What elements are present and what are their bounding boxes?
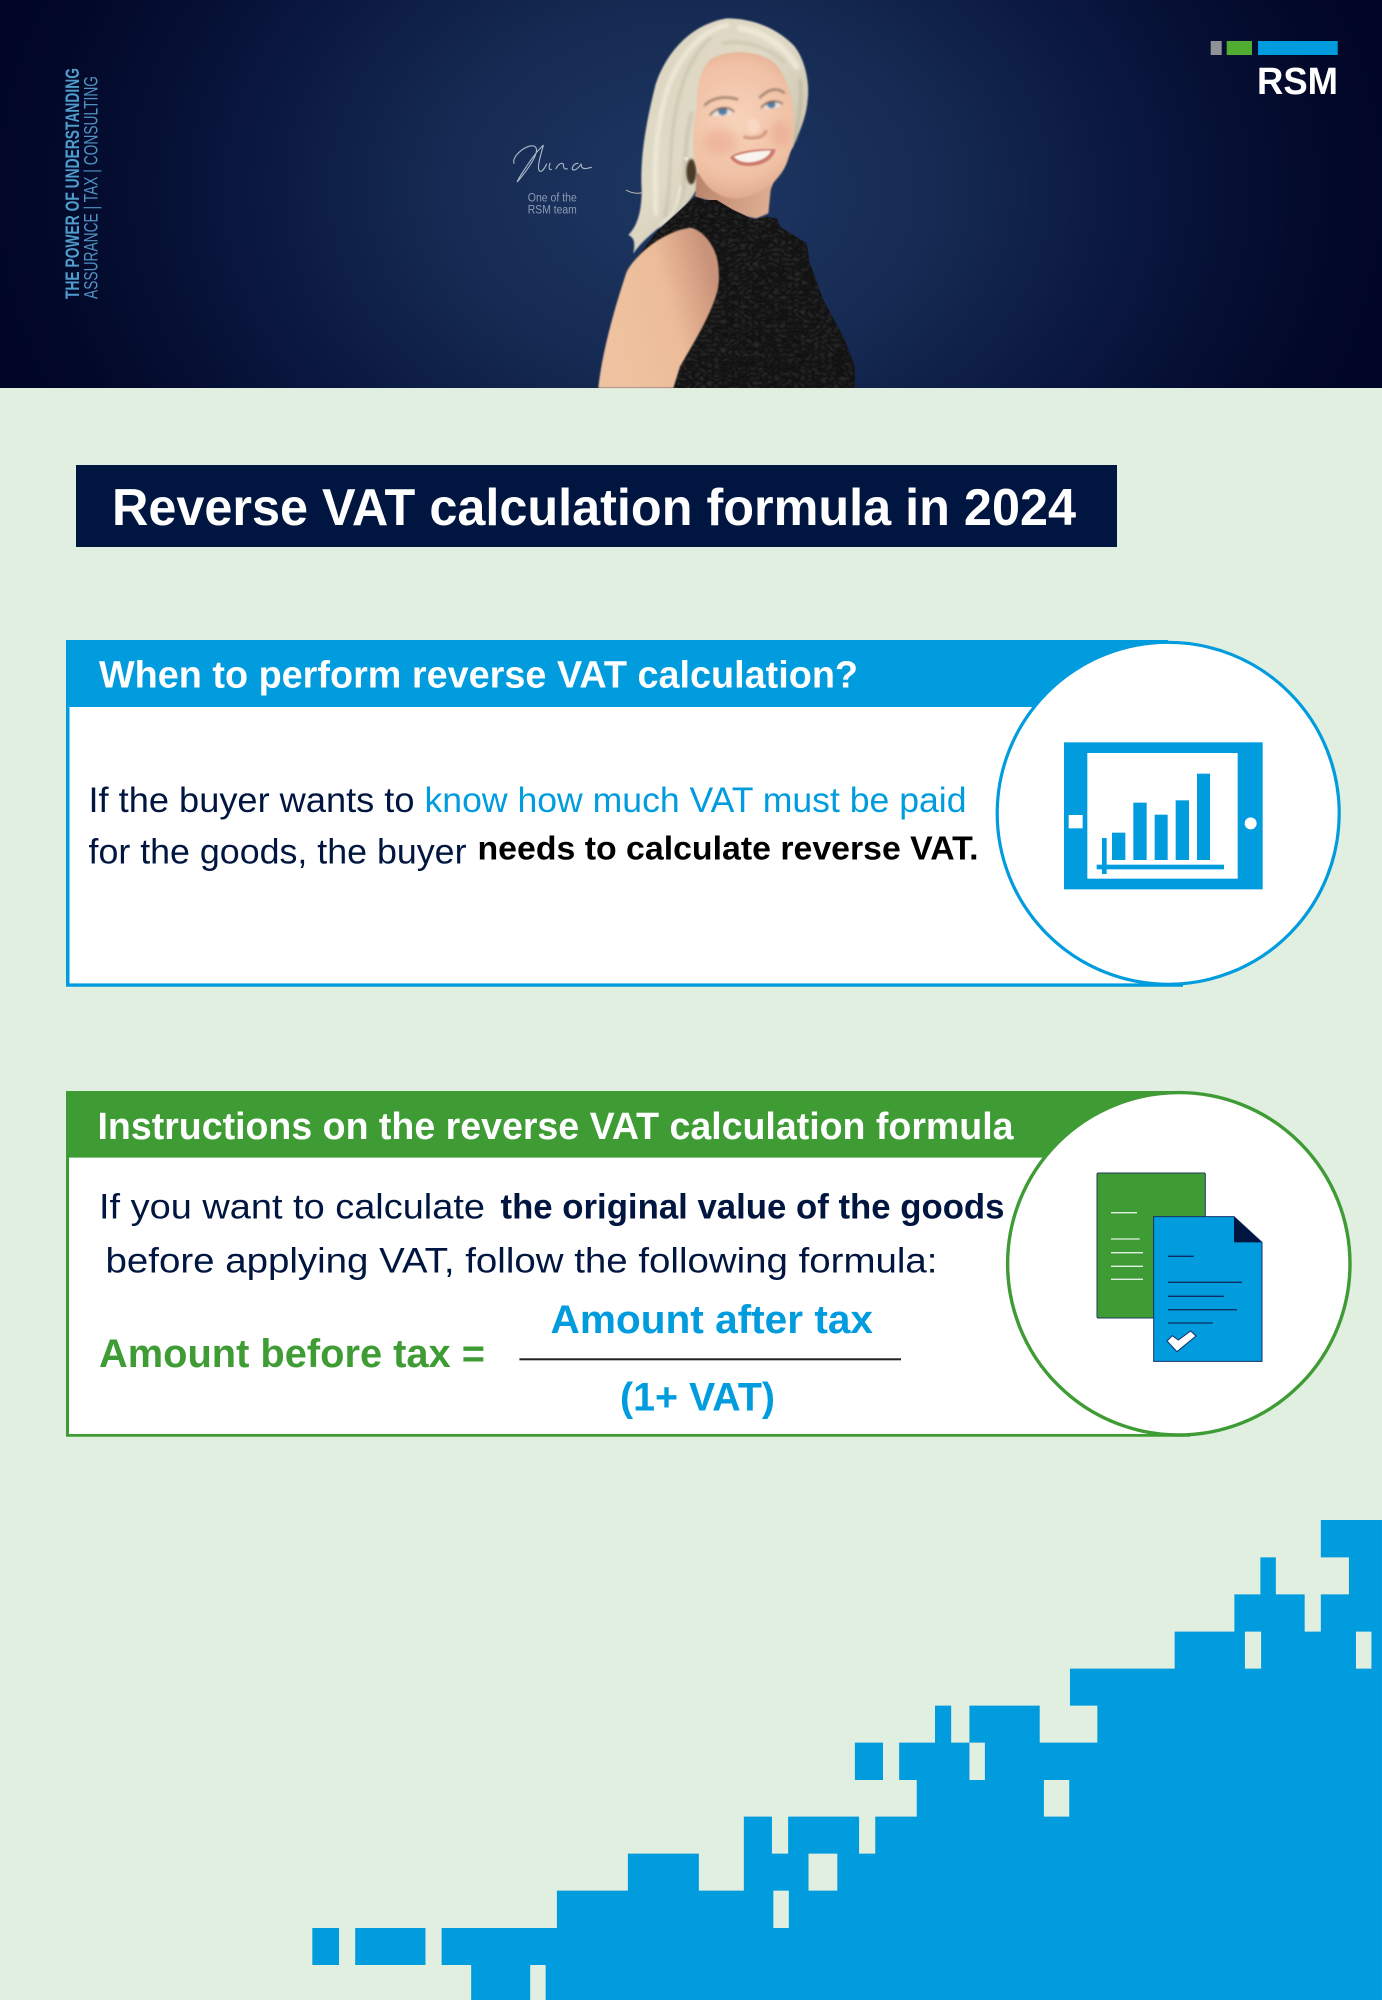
panel text: If you want to calculate [99,1187,485,1226]
panel heading: Instructions on the reverse VAT calculation formula [98,1106,1014,1148]
icon: tablet with bar chart [1064,742,1263,889]
signature: Nina: One of the [528,193,577,205]
neck [695,173,777,218]
icon: documents with check mark [1097,1173,1262,1361]
panel text: If the buyer wants to [88,781,414,820]
panel body [66,1091,1190,1437]
signature: Nina [514,145,591,216]
RSM logo [1211,41,1338,103]
portrait photo of Nina [598,18,855,388]
banner background [0,0,1382,388]
arm [598,228,719,388]
panel text [88,781,978,871]
black dress [627,197,855,388]
panel text [99,1187,1004,1280]
panel text: the original value of the goods [500,1187,1004,1226]
eyebrows [705,90,784,105]
eyes [710,101,783,116]
dark hair and earring behind the ear [684,157,696,184]
face [693,52,794,198]
formula: (1+ VAT) [620,1376,775,1420]
title bar: Reverse VAT calculation formula in 2024 [112,479,1076,537]
panel: when to perform reverse VAT calculation [66,640,1339,987]
stray hair strand [626,190,643,193]
formula [99,1298,901,1420]
signature: Nina: RSM team [528,204,577,216]
side tagline: ASSURANCE | TAX | CONSULTING [82,76,102,299]
smile [730,149,776,166]
nose [743,119,766,138]
panel body [66,640,1183,987]
decorative pixel staircase [312,1520,1382,2000]
circle badge [1008,1093,1350,1435]
panel text: needs to calculate reverse VAT. [478,829,978,866]
panel text: before applying VAT, follow the following formula: [106,1241,937,1280]
header banner [0,0,1382,388]
circle badge [997,642,1339,984]
formula: Amount before tax = [99,1332,485,1376]
panel: instructions on the formula [66,1091,1350,1437]
formula: Amount after tax [550,1298,873,1342]
hair [628,18,808,254]
panel text: know how much VAT must be paid [424,781,966,820]
panel text: for the goods, the buyer [88,832,467,871]
title bar [76,465,1117,547]
RSM logo: RSM [1257,61,1338,103]
side tagline [63,68,102,299]
panel heading: When to perform reverse VAT calculation? [99,655,858,697]
